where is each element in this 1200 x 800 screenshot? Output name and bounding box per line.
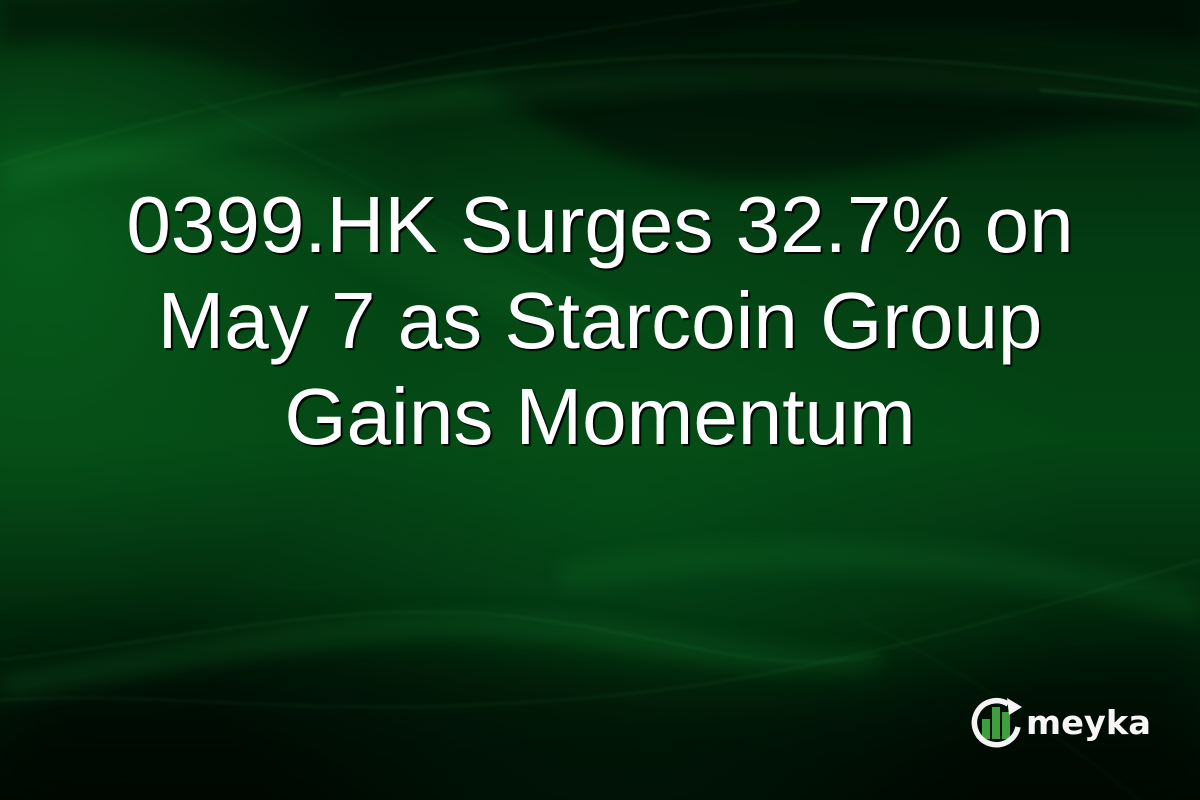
icon: circular arrow with green bars	[974, 698, 1022, 745]
wordmark: meyka	[1026, 703, 1151, 742]
title	[126, 180, 1074, 461]
title: May 7 as Starcoin Group	[158, 276, 1042, 365]
title: Gains Momentum	[284, 372, 916, 461]
title: 0399.HK Surges 32.7% on	[126, 180, 1074, 269]
light wave glows	[0, 65, 1200, 200]
logo: meyka	[972, 698, 1151, 748]
dark lobe: lower band	[0, 638, 1200, 800]
dark lobe: upper right	[480, 48, 1200, 180]
